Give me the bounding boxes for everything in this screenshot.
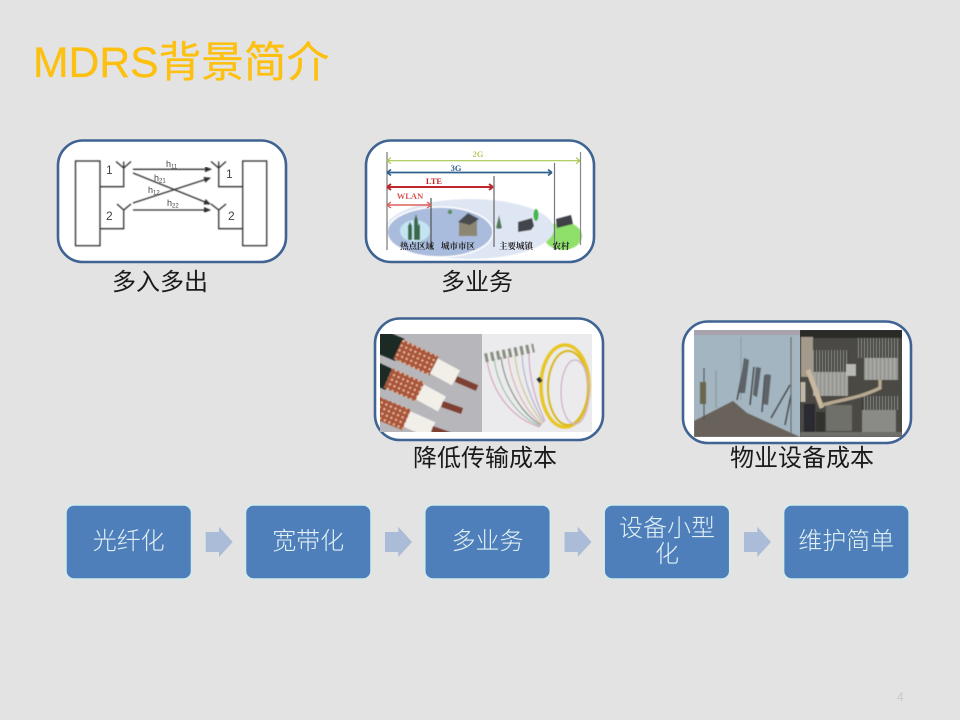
MIMO labels: 21 — [159, 178, 166, 184]
MIMO labels: h — [148, 185, 153, 195]
panel: property equipment cost photos — [683, 322, 911, 443]
panel: multi-service coverage — [366, 140, 594, 262]
coverage lines — [387, 152, 580, 250]
process step: 宽带化: 宽带化 — [272, 528, 344, 555]
page number: 4 — [897, 690, 904, 704]
caption: 降低传输成本: 降低传输成本 — [413, 445, 557, 472]
MIMO labels: 12 — [153, 190, 160, 196]
process step: 多业务: 多业务 — [452, 528, 524, 555]
photo: coaxial cables — [380, 334, 482, 432]
panel: MIMO diagram — [58, 140, 286, 262]
arrow: step 1 to 2 — [206, 527, 233, 557]
process step: 设备小型化 — [604, 505, 730, 579]
arrow: step 2 to 3 — [385, 527, 412, 557]
process step: 维护简单 — [784, 505, 909, 579]
MIMO channel arrows — [133, 169, 211, 210]
coverage labels: 农村 — [551, 241, 570, 251]
MIMO labels: h — [167, 198, 172, 208]
process step: 设备小型化: 设备小型 — [619, 515, 715, 542]
process step: 维护简单: 维护简单 — [798, 528, 894, 555]
arrow: step 4 to 5 — [744, 527, 771, 557]
caption: 物业设备成本: 物业设备成本 — [730, 445, 874, 472]
coverage labels: 城市市区 — [441, 241, 475, 251]
photo: rooftop antennas — [694, 330, 800, 437]
MIMO labels: 2 — [228, 209, 235, 223]
panel: transmission cost photos — [360, 318, 603, 440]
MIMO labels — [106, 159, 235, 223]
MIMO labels: h — [154, 173, 159, 183]
arrow: step 3 to 4 — [564, 527, 592, 557]
MIMO antennas and transceivers — [76, 161, 267, 246]
coverage labels: LTE — [426, 176, 442, 186]
process step: 多业务 — [425, 505, 550, 579]
process step: 光纤化 — [66, 505, 192, 579]
caption: 多入多出: 多入多出 — [112, 269, 208, 296]
photo: fibre pigtails — [482, 334, 592, 432]
process step: 光纤化: 光纤化 — [93, 528, 165, 555]
MIMO labels: 1 — [106, 163, 113, 177]
coverage labels: 2G — [473, 149, 484, 159]
MIMO labels: 2 — [106, 209, 113, 223]
caption: 多业务: 多业务 — [441, 269, 513, 296]
title: MDRS背景简介 — [33, 39, 329, 87]
process step: 设备小型化: 化 — [655, 541, 679, 568]
MIMO labels: 22 — [172, 204, 179, 210]
coverage labels: 3G — [451, 163, 462, 173]
photo: equipment on wall — [800, 330, 902, 437]
MIMO labels: 11 — [171, 164, 178, 170]
MIMO labels: 1 — [226, 167, 233, 181]
coverage labels: 主要城镇 — [499, 241, 534, 251]
MIMO labels: h — [166, 159, 171, 169]
coverage labels: WLAN — [397, 191, 424, 201]
coverage zones — [386, 199, 582, 259]
coverage labels: 热点区域 — [400, 241, 434, 251]
process step: 宽带化 — [246, 505, 371, 579]
coverage labels — [397, 149, 570, 251]
